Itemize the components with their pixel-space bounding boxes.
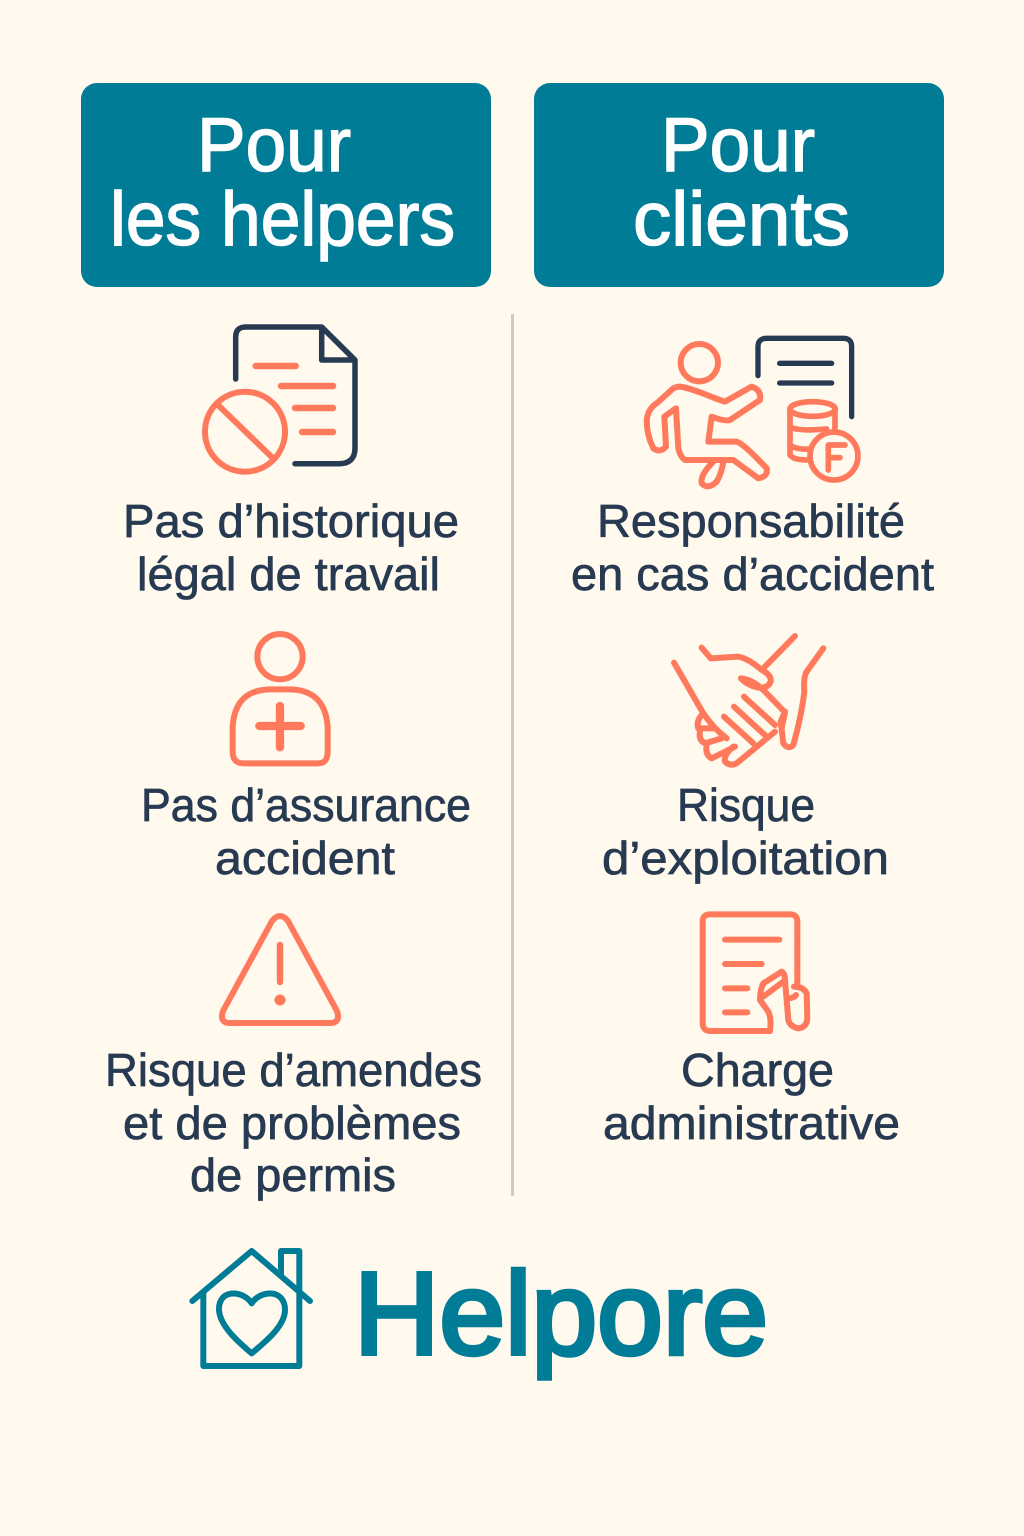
header: Pour clients xyxy=(534,83,944,287)
text: Risque d'exploitation: d’exploitation xyxy=(602,832,889,884)
header: Pour clients: clients xyxy=(633,177,850,262)
header: Pour les helpers xyxy=(81,83,491,287)
text: Risque d'amendes et de problèmes de permis: et de problèmes xyxy=(123,1097,461,1149)
text: Pas d'assurance accident: accident xyxy=(215,832,395,884)
text: Charge administrative xyxy=(603,1044,900,1149)
text: Pas d'assurance accident xyxy=(141,779,471,884)
text: Charge administrative: administrative xyxy=(603,1097,900,1149)
icon: document with signing hand xyxy=(703,914,807,1031)
text: Pas d'historique légal de travail: Pas d’historique xyxy=(123,495,459,547)
icon: person falling with document and fine coins xyxy=(647,338,858,486)
logo wordmark: Helpore: Helpore xyxy=(354,1248,768,1379)
text: Responsabilité en cas d'accident: Responsabilité xyxy=(597,495,905,547)
text: Risque d'exploitation: Risque xyxy=(677,779,815,831)
text: Pas d'historique légal de travail xyxy=(123,495,459,600)
text: Risque d'amendes et de problèmes de permis xyxy=(105,1044,482,1201)
icon: handshake xyxy=(674,636,823,765)
text: Responsabilité en cas d'accident xyxy=(571,495,934,600)
text: Risque d'amendes et de problèmes de permis: Risque d’amendes xyxy=(105,1044,482,1096)
icon: document with prohibition sign xyxy=(205,327,355,472)
logo icon: house with heart xyxy=(192,1251,310,1366)
text: Charge administrative: Charge xyxy=(681,1044,834,1096)
text: Risque d'amendes et de problèmes de permis: de permis xyxy=(190,1149,396,1201)
text: Risque d'exploitation xyxy=(602,779,889,884)
header: Pour les helpers: Pour xyxy=(197,103,351,188)
text: Responsabilité en cas d'accident: en cas d’accident xyxy=(571,548,934,600)
icon: person with medical cross xyxy=(233,634,328,763)
icon: warning triangle xyxy=(222,916,338,1023)
header: Pour clients: Pour xyxy=(661,103,815,188)
header: Pour les helpers: les helpers xyxy=(110,177,455,262)
text: Pas d'assurance accident: Pas d’assurance xyxy=(141,779,471,831)
text: Pas d'historique légal de travail: légal de travail xyxy=(137,548,440,600)
